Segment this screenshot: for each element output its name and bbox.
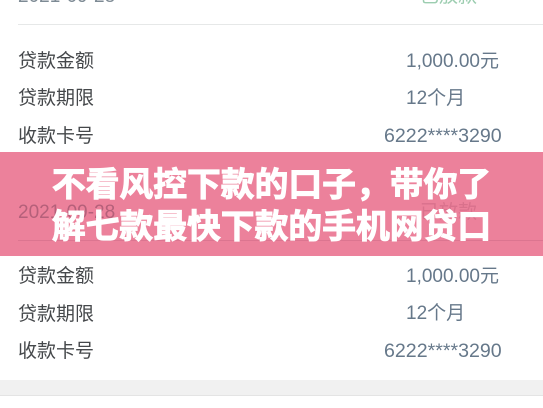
banner title: 不看风控下款的口子，带你了 [52,157,491,206]
lower details: card number [18,340,502,362]
pink title banner [0,152,543,256]
top details: card number: 收款卡号 [18,126,94,147]
lower details: loan term [18,303,465,325]
lower details: loan amount: 贷款金额 [18,266,94,287]
lower details: loan amount [18,266,499,287]
lower details: card number: 收款卡号 [18,341,94,362]
lower details: card number: 6222****3290 [384,340,502,362]
top details: card number [18,125,502,147]
lower details: loan term: 贷款期限 [18,304,94,325]
top details: loan amount: 贷款金额 [18,51,94,72]
lower details: loan amount: 1,000.00元 [406,266,499,287]
top details: loan term [18,88,465,109]
banner title [52,157,491,248]
top details: loan amount [18,50,499,72]
top details: loan term: 12个月 [406,88,465,109]
ghost date behind banner: 2021-09-28 [18,202,115,223]
lower details: loan term: 12个月 [406,303,465,324]
top details: loan amount: 1,000.00元 [406,51,499,72]
ghost status behind banner: 已放款 [420,202,477,223]
bottom grey separator band [0,380,543,396]
banner title: 解七款最快下款的手机网贷口 [52,199,491,248]
top details: loan term: 贷款期限 [18,88,94,109]
top details: card number: 6222****3290 [384,125,502,147]
